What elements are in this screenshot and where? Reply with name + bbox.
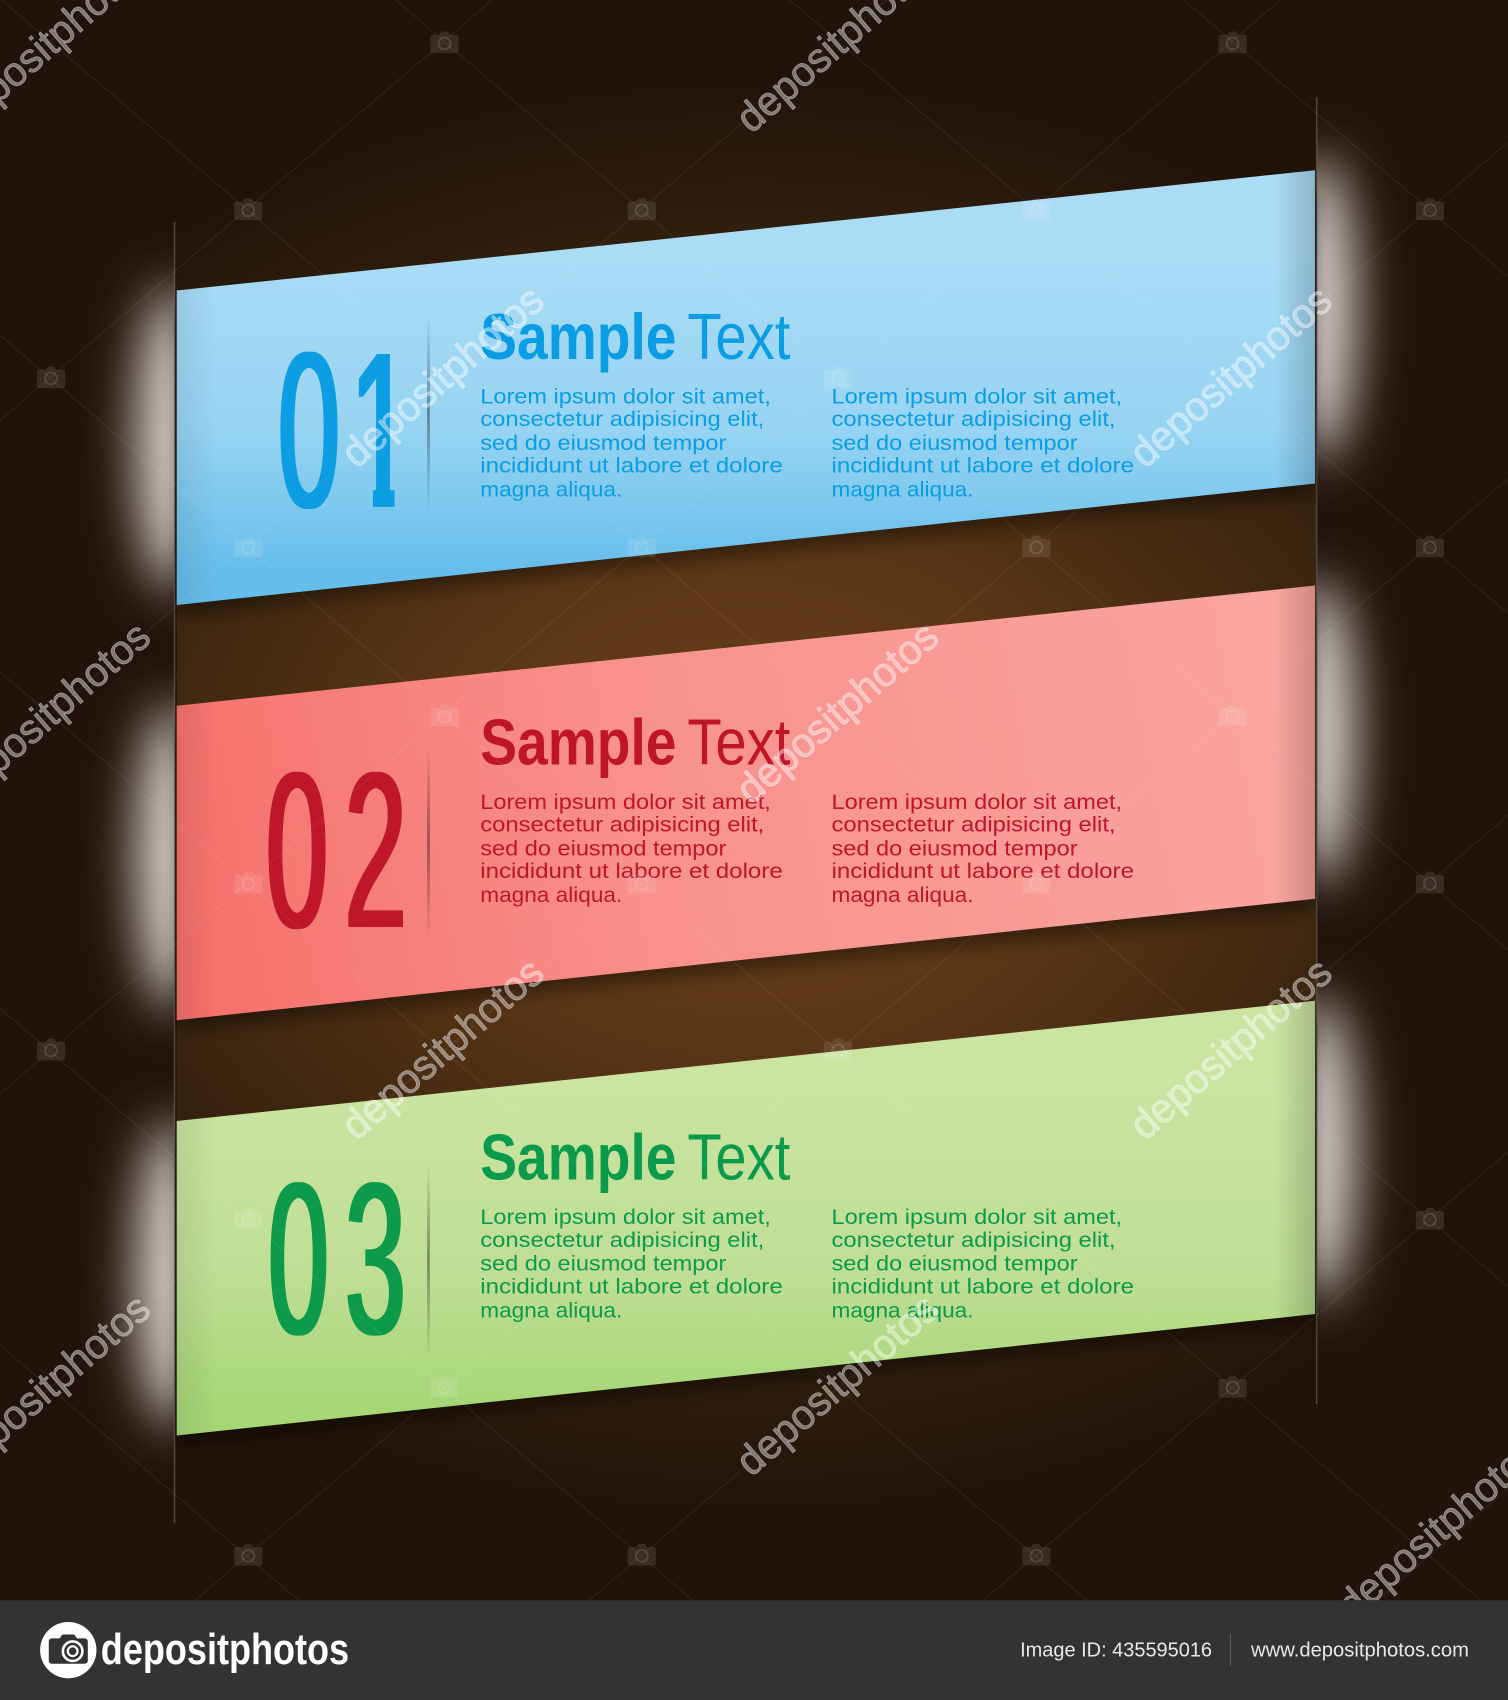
body text 01 right: Lorem ipsum dolor sit amet, [832, 385, 1122, 408]
number 03: 3 [345, 1139, 406, 1380]
body text 03 right: sed do eiusmod tempor [832, 1253, 1078, 1276]
body text 01 left: consectetur adipisicing elit, [480, 408, 764, 431]
depositphotos diagonal watermarks: depositphotos [1121, 949, 1341, 1148]
number 02: 2 [345, 727, 407, 975]
body text 02 right: sed do eiusmod tempor [832, 837, 1078, 860]
heading 03: Text [687, 1121, 790, 1194]
body text 01 right: consectetur adipisicing elit, [832, 408, 1116, 431]
heading 01: Text [687, 300, 790, 373]
heading 03: Sample [480, 1121, 676, 1194]
body text 03 left: consectetur adipisicing elit, [480, 1229, 764, 1252]
body text 03 left: Lorem ipsum dolor sit amet, [480, 1206, 771, 1229]
band shadows [177, 195, 1315, 1446]
website url: www.depositphotos.com [1250, 1640, 1469, 1662]
divider 01 [427, 314, 430, 512]
footer divider [1229, 1634, 1231, 1666]
depositphotos diagonal watermarks: depositphotos [727, 613, 947, 812]
divider 03 [427, 1163, 430, 1358]
body text 03 right: consectetur adipisicing elit, [832, 1229, 1116, 1252]
body text 02 left: consectetur adipisicing elit, [480, 814, 764, 837]
panel: band 01 blue [177, 170, 1315, 605]
depositphotos diagonal watermarks: depositphotos [1121, 277, 1341, 476]
depositphotos diagonal watermarks: depositphotos [332, 277, 552, 476]
inner brown lit panel [177, 0, 1316, 1600]
number 01: 1 [350, 307, 412, 555]
right side glows [1280, 157, 1354, 1301]
body text 02 right: Lorem ipsum dolor sit amet, [832, 791, 1122, 814]
body text 02 left: incididunt ut labore et dolore [480, 860, 783, 883]
icon: camera logo [40, 1622, 96, 1678]
body text 03 right [832, 1206, 1134, 1322]
panel: band 03 green [177, 1001, 1315, 1435]
body text 03 left [480, 1206, 783, 1322]
body text 02 right [832, 791, 1134, 907]
number 01 [280, 352, 395, 509]
heading 01: Sample [480, 300, 676, 373]
body text 03 left: sed do eiusmod tempor [480, 1253, 726, 1276]
body text 01 right [832, 385, 1134, 502]
depositphotos diagonal watermarks: depositphotos [332, 949, 552, 1148]
body text 01 left [480, 385, 783, 502]
body text 01 left: Lorem ipsum dolor sit amet, [480, 385, 771, 408]
left side glows [138, 287, 211, 1426]
heading 02: Text [687, 705, 790, 778]
number 03: 0 [268, 1139, 329, 1380]
body text 01 right: sed do eiusmod tempor [832, 432, 1078, 455]
body text 03 right: incididunt ut labore et dolore [832, 1275, 1134, 1298]
body text 02 right: magna aliqua. [832, 884, 974, 907]
panel: band 02 red [177, 585, 1315, 1020]
body text 01 right: magna aliqua. [832, 479, 974, 502]
body text 02 left: sed do eiusmod tempor [480, 837, 726, 860]
body text 01 right: incididunt ut labore et dolore [832, 455, 1134, 478]
body text 01 left: magna aliqua. [480, 479, 622, 502]
logo wordmark: depositphotos [101, 1626, 349, 1674]
body text 03 right: Lorem ipsum dolor sit amet, [832, 1206, 1122, 1229]
footer bar [0, 1600, 1508, 1700]
body text 03 left: magna aliqua. [480, 1299, 622, 1322]
left slit line [174, 222, 176, 1523]
body text 01 left: sed do eiusmod tempor [480, 432, 726, 455]
number 02: 0 [266, 727, 328, 975]
body text 02 right: consectetur adipisicing elit, [832, 814, 1116, 837]
right slit line [1316, 98, 1318, 1404]
body text 02 left: magna aliqua. [480, 884, 622, 907]
body text 02 left: Lorem ipsum dolor sit amet, [480, 791, 771, 814]
body text 03 left: incididunt ut labore et dolore [480, 1275, 783, 1298]
body text 02 left [480, 791, 783, 907]
heading 02: Sample [480, 705, 676, 778]
divider 02 [427, 746, 430, 941]
body text 01 left: incididunt ut labore et dolore [480, 455, 783, 478]
body text 03 right: magna aliqua. [832, 1299, 974, 1322]
depositphotos diagonal watermarks: depositphotos [727, 1285, 947, 1485]
number 01: 0 [278, 307, 340, 555]
image id: Image ID: 435595016 [1020, 1640, 1212, 1662]
body text 02 right: incididunt ut labore et dolore [832, 860, 1134, 883]
